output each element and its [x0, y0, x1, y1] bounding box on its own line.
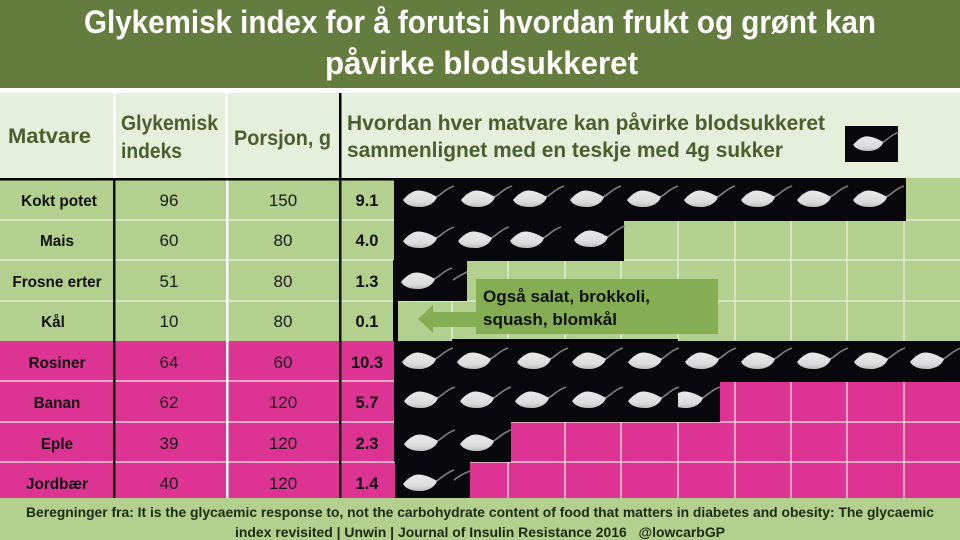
spoons: Eple [394, 422, 511, 462]
arrow: callout pointing to Kål bar [418, 305, 476, 333]
table header: Matvare [8, 125, 91, 148]
title banner: Glykemisk index for å forutsi hvordan frukt og grønt kan [84, 4, 876, 40]
spoons: Jordbær [395, 462, 470, 498]
row: Frosne erter: 80 [274, 272, 292, 291]
source footer: Beregninger fra: It is the glycaemic response to, not the carbohydrate content of food that matters in diabetes and obesity: The glycaemic [26, 505, 934, 520]
vegetable rows background [0, 178, 960, 341]
row: Kokt potet: 150 [269, 191, 297, 210]
row: Jordbær: 40 [160, 474, 178, 493]
row: Eple: 120 [269, 434, 297, 453]
row: Kokt potet: 96 [160, 191, 178, 210]
row: Banan: 120 [269, 393, 297, 412]
table header: Glykemisk [121, 112, 218, 135]
row: Kokt potet [21, 191, 378, 210]
row: Frosne erter: 51 [160, 272, 178, 291]
row: Frosne erter: 1.3 [356, 273, 378, 291]
row: Rosiner: Rosiner [29, 355, 86, 372]
row: Mais: 60 [160, 231, 178, 250]
spoons: Rosiner [394, 341, 960, 382]
row: Rosiner [29, 353, 383, 372]
row: Banan: 5.7 [356, 394, 378, 412]
title banner: påvirke blodsukkeret [325, 45, 638, 81]
table header: Hvordan hver matvare kan påvirke blodsukkeret [347, 112, 825, 135]
row: Banan: 62 [160, 393, 178, 412]
row: Eple: Eple [41, 436, 73, 453]
fruit rows background [0, 341, 960, 499]
row: Mais: 4.0 [356, 232, 378, 250]
row: Banan: Banan [34, 395, 80, 412]
row: Eple: 2.3 [356, 435, 378, 453]
row: Rosiner: 10.3 [351, 354, 383, 372]
row: Eple: 39 [160, 434, 178, 453]
row: Frosne erter [12, 272, 378, 291]
callout [476, 279, 718, 334]
row: Kål: 10 [160, 312, 178, 331]
table grid lines [0, 178, 960, 498]
table header: sammenlignet med en teskje med 4g sukker [347, 139, 783, 162]
spoons: Mais [394, 220, 625, 261]
row: Jordbær: Jordbær [26, 476, 88, 493]
row: Jordbær: 120 [269, 474, 297, 493]
source footer [0, 498, 960, 540]
title banner [0, 0, 960, 88]
callout: Også salat, brokkoli, [483, 287, 650, 306]
row: Mais [40, 231, 378, 250]
row: Jordbær: 1.4 [356, 475, 379, 493]
row: Kål: 0.1 [356, 313, 378, 331]
row: Banan [34, 393, 378, 412]
row: Eple [41, 434, 378, 453]
row: Rosiner: 64 [160, 353, 178, 372]
spoons: Frosne erter [393, 260, 467, 301]
callout: squash, blomkål [483, 310, 617, 329]
row: Mais: 80 [274, 231, 292, 250]
table header: indeks [121, 140, 182, 163]
row: Frosne erter: Frosne erter [12, 274, 102, 291]
table header: Porsjon, g [234, 127, 331, 150]
row: Kål [41, 312, 378, 331]
row: Kokt potet: Kokt potet [21, 193, 97, 210]
icon: legend sugar spoon [845, 126, 899, 162]
row: Kål: 80 [274, 312, 292, 331]
row: Mais: Mais [40, 233, 74, 250]
source footer: index revisited | Unwin | Journal of Insulin Resistance 2016 @lowcarbGP [235, 525, 725, 540]
table header [0, 93, 960, 180]
row: Rosiner: 60 [274, 353, 292, 372]
spoons: Banan [394, 382, 720, 422]
row: Kål: Kål [41, 314, 65, 331]
row: Kokt potet: 9.1 [356, 192, 378, 210]
spoons: Kokt potet [394, 178, 906, 221]
row: Jordbær [26, 474, 379, 493]
